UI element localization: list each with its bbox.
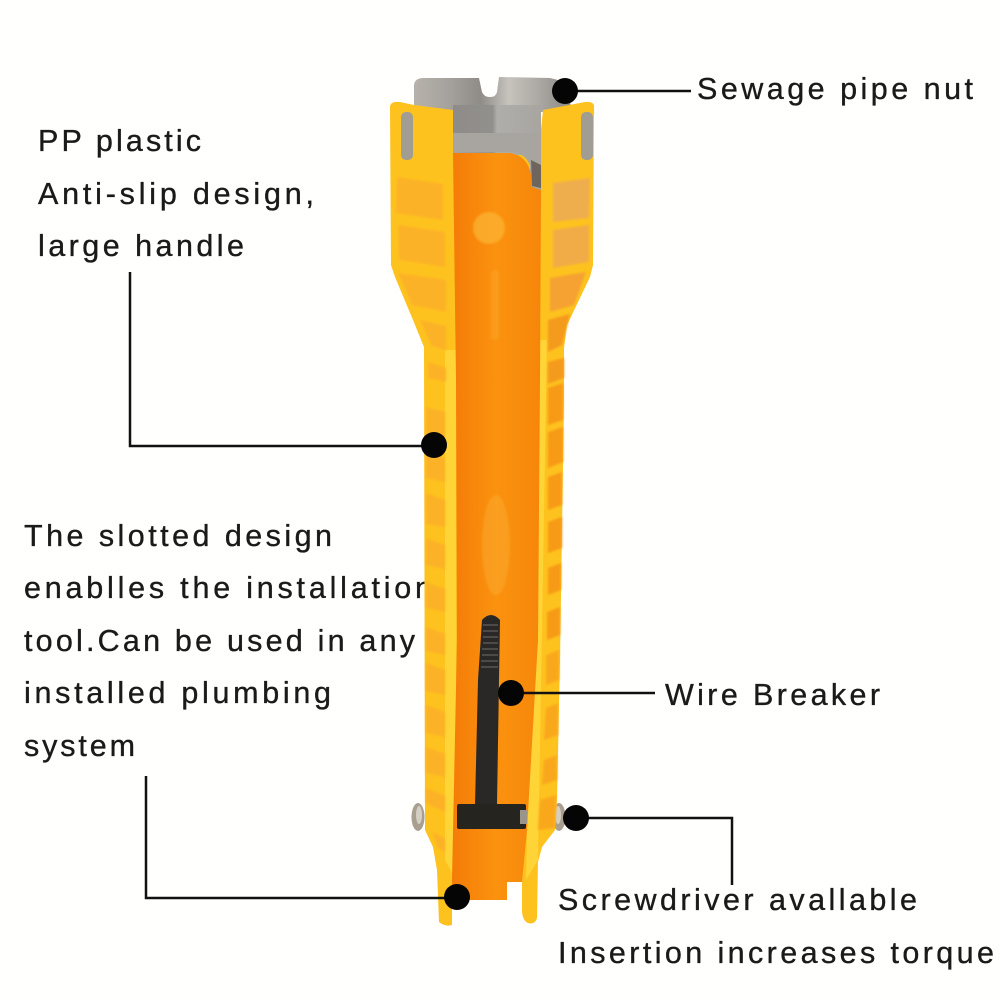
- text: PP plastic description: large handle: [38, 229, 244, 263]
- text: slotted design description: tool.Can be used in any: [24, 624, 416, 658]
- wire breaker: screw end: [520, 810, 527, 824]
- label: wire breaker: Wire Breaker: [665, 678, 880, 712]
- text: PP plastic description: PP plastic: [38, 124, 201, 158]
- metal collar: [453, 105, 541, 155]
- text: slotted design description: system: [24, 729, 135, 763]
- callout line: screwdriver: [563, 805, 732, 885]
- text: PP plastic description: [38, 124, 314, 263]
- wire breaker: threaded rod: [475, 615, 500, 805]
- tool: faucet and sink wrench: [390, 77, 594, 926]
- right grip windows: [538, 178, 590, 830]
- orange core: [452, 153, 541, 900]
- callout line: sewage pipe nut: [552, 78, 691, 104]
- left grip windows: [396, 177, 446, 852]
- callout line: slotted design: [146, 776, 470, 910]
- head rivets: [401, 112, 593, 160]
- label: sewage pipe nut: Sewage pipe nut: [697, 72, 974, 106]
- text: PP plastic description: Anti-slip design,: [38, 177, 314, 211]
- text: screwdriver description: Screwdriver avallable: [558, 883, 917, 917]
- text: slotted design description: The slotted design: [24, 519, 332, 553]
- text: screwdriver description: Insertion increases torque: [558, 936, 994, 970]
- inner bright ribs: [445, 340, 547, 880]
- wire breaker: thread marks: [481, 625, 498, 667]
- metal collar lighter band: [453, 133, 541, 190]
- text: slotted design description: [24, 519, 432, 763]
- metal nut head: [414, 77, 572, 112]
- callout line: handle: [130, 272, 447, 458]
- light spot details on core: [473, 212, 510, 595]
- metal tail shadow: [531, 160, 541, 188]
- text: slotted design description: enablles the installation: [24, 571, 432, 605]
- plastic body: [390, 102, 594, 926]
- text: screwdriver description: [558, 883, 994, 970]
- side screws: [412, 803, 566, 831]
- wire breaker: cross bar: [457, 804, 526, 829]
- callout line: wire breaker: [498, 680, 655, 706]
- text: slotted design description: installed plumbing: [24, 676, 331, 710]
